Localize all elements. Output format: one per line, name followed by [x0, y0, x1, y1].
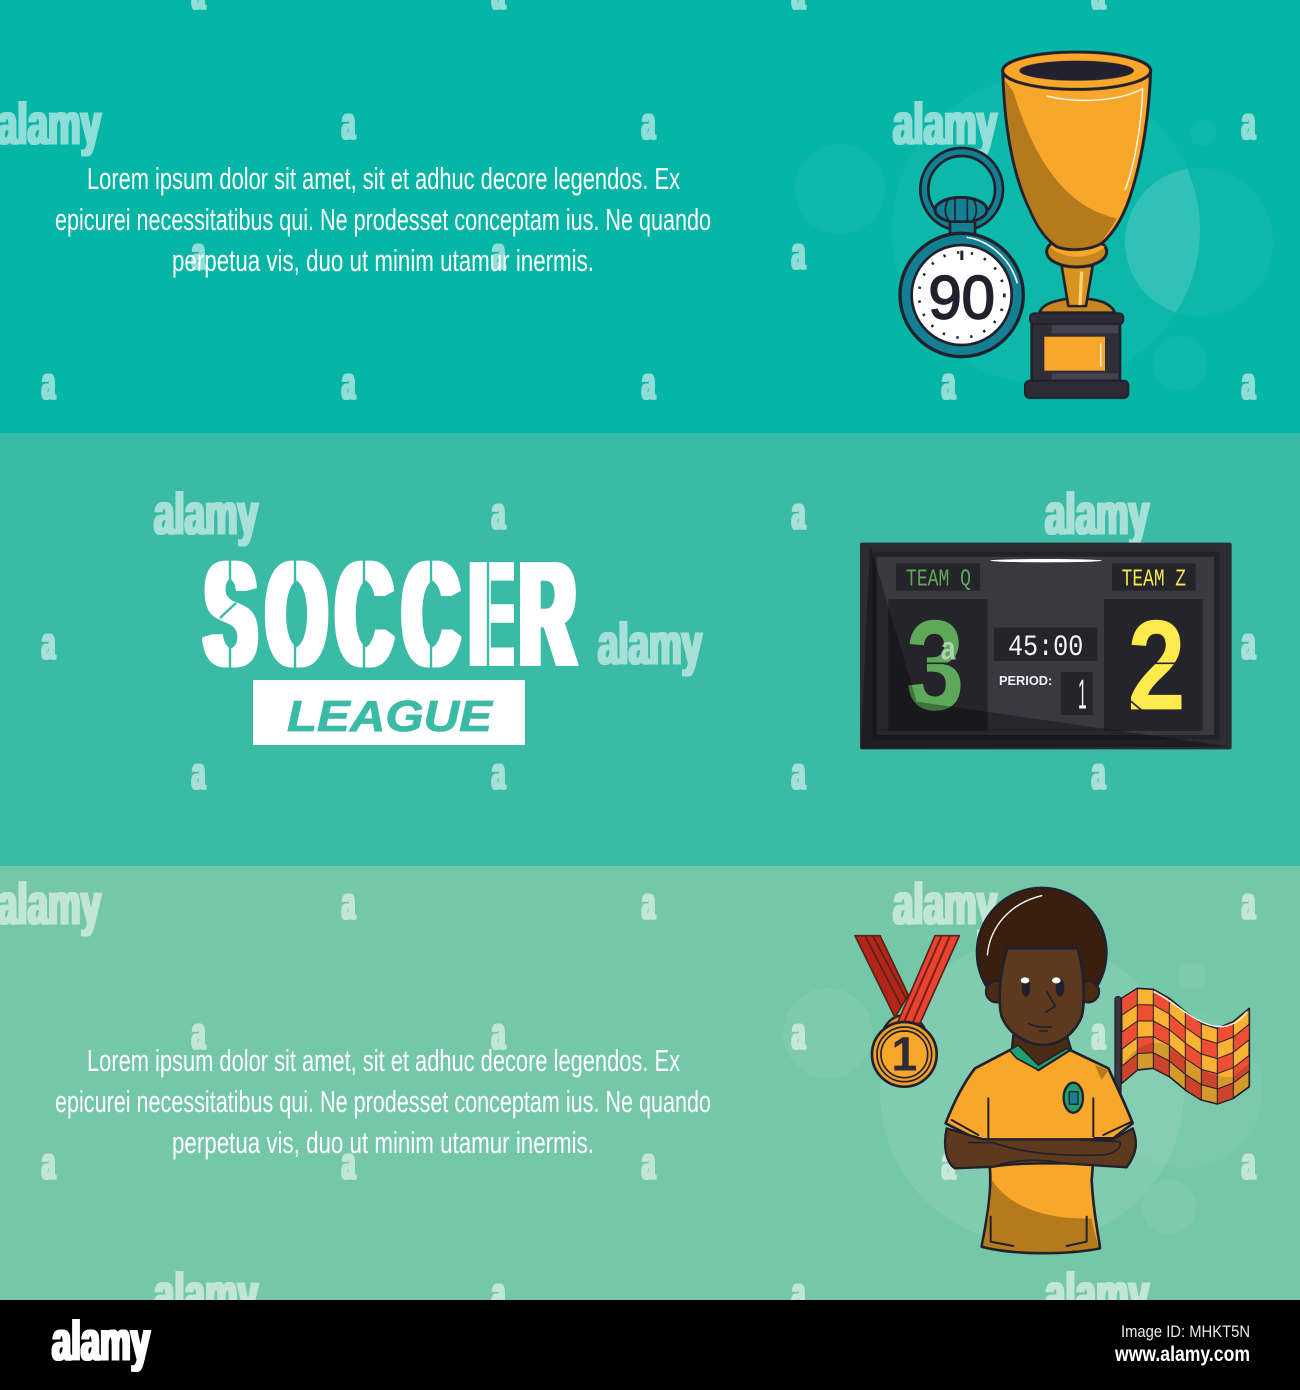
watermark pattern: a [792, 487, 805, 539]
watermark pattern: a [492, 227, 505, 279]
watermark pattern: a [942, 357, 955, 409]
icon: soccer player with crossed arms [945, 888, 1136, 1253]
watermark pattern: a [642, 357, 655, 409]
footer logo: alamy [52, 1309, 150, 1372]
watermark pattern: alamy [893, 92, 997, 157]
watermark pattern: alamy [0, 92, 101, 157]
watermark pattern: a [642, 97, 655, 149]
icon: gold medal: 1 [891, 1028, 917, 1082]
score: team Q: a [941, 630, 956, 667]
watermark pattern: a [642, 877, 655, 929]
footer bar [0, 1300, 1300, 1390]
watermark pattern: a [942, 1137, 955, 1189]
text block: top paragraph: perpetua vis, duo ut minim utamur inermis. [172, 243, 594, 278]
icon: gold medal [855, 936, 959, 1087]
watermark pattern: a [192, 227, 205, 279]
watermark pattern: a [342, 97, 355, 149]
watermark pattern: a [192, 747, 205, 799]
match clock: 45:00 [1008, 631, 1083, 665]
panel: bottom light green band [0, 866, 1300, 1300]
watermark pattern: a [792, 1007, 805, 1059]
score: team Q: 3 [906, 594, 964, 737]
period display: 1 [1078, 670, 1087, 717]
text block: bottom paragraph: epicurei necessitatibus qui. Ne prodesset conceptam ius. Ne quando [55, 1084, 711, 1119]
period display: PERIOD: [999, 674, 1052, 688]
text block: top paragraph: Lorem ipsum dolor sit amet, sit et adhuc decore legendos. Ex [87, 161, 680, 196]
score: team Z: 2 [1127, 594, 1186, 737]
chart: scoreboard [860, 543, 1232, 749]
watermark pattern: a [42, 617, 55, 669]
text block: bottom paragraph [55, 1043, 711, 1160]
watermark pattern: a [42, 1137, 55, 1189]
icon: checkered flag [1115, 988, 1249, 1104]
image id: Image ID: MHKT5N [1121, 1322, 1250, 1341]
watermark pattern: a [1092, 1007, 1105, 1059]
watermark pattern: a [492, 1007, 505, 1059]
watermark pattern: a [792, 1267, 805, 1319]
text block: top paragraph [55, 161, 711, 278]
watermark pattern: a [1242, 97, 1255, 149]
watermark pattern: a [1242, 357, 1255, 409]
glass shadow [861, 545, 1230, 748]
text block: top paragraph: epicurei necessitatibus qui. Ne prodesset conceptam ius. Ne quando [55, 202, 711, 237]
watermark pattern: a [492, 487, 505, 539]
icon: gold trophy [1003, 52, 1151, 398]
watermark pattern: a [192, 1007, 205, 1059]
watermark pattern: a [1242, 877, 1255, 929]
scoreboard frame [860, 543, 1232, 749]
watermark pattern: a [642, 1137, 655, 1189]
period display [999, 670, 1093, 717]
panel: top teal band [0, 0, 1300, 433]
watermark pattern: alamy [154, 482, 258, 547]
watermark pattern: alamy [598, 612, 702, 677]
watermark pattern: a [1242, 1137, 1255, 1189]
text block: bottom paragraph: perpetua vis, duo ut minim utamur inermis. [172, 1125, 594, 1160]
icon: stopwatch showing 90 [900, 152, 1023, 357]
watermark pattern: alamy [1045, 1262, 1149, 1327]
watermark pattern: a [1092, 747, 1105, 799]
text block: bottom paragraph: Lorem ipsum dolor sit amet, sit et adhuc decore legendos. Ex [87, 1043, 680, 1078]
watermark pattern: a [492, 747, 505, 799]
watermark pattern: alamy [1045, 482, 1149, 547]
title: Soccer League [205, 531, 575, 745]
watermark pattern: a [492, 1267, 505, 1319]
team Q label: TEAM Q [906, 566, 971, 593]
watermark pattern: alamy [154, 1262, 258, 1327]
website: www.alamy.com [1114, 1343, 1250, 1366]
subheading: LEAGUE badge: LEAGUE [287, 692, 494, 741]
subheading: LEAGUE badge [253, 680, 525, 745]
watermark pattern: a [792, 227, 805, 279]
icon: stopwatch showing 90: 90 [928, 263, 995, 332]
watermark pattern: a [342, 1137, 355, 1189]
watermark pattern: alamy [893, 872, 997, 937]
watermark pattern: a [792, 747, 805, 799]
watermark pattern: a [342, 357, 355, 409]
watermark pattern: alamy [0, 872, 101, 937]
watermark pattern: a [42, 357, 55, 409]
watermark pattern: a [342, 877, 355, 929]
team Z label: TEAM Z [1122, 566, 1186, 593]
heading: SOCCER stencil wordmark: SOCCER [205, 531, 575, 696]
watermark pattern: a [1242, 617, 1255, 669]
panel: middle green band [0, 433, 1300, 866]
